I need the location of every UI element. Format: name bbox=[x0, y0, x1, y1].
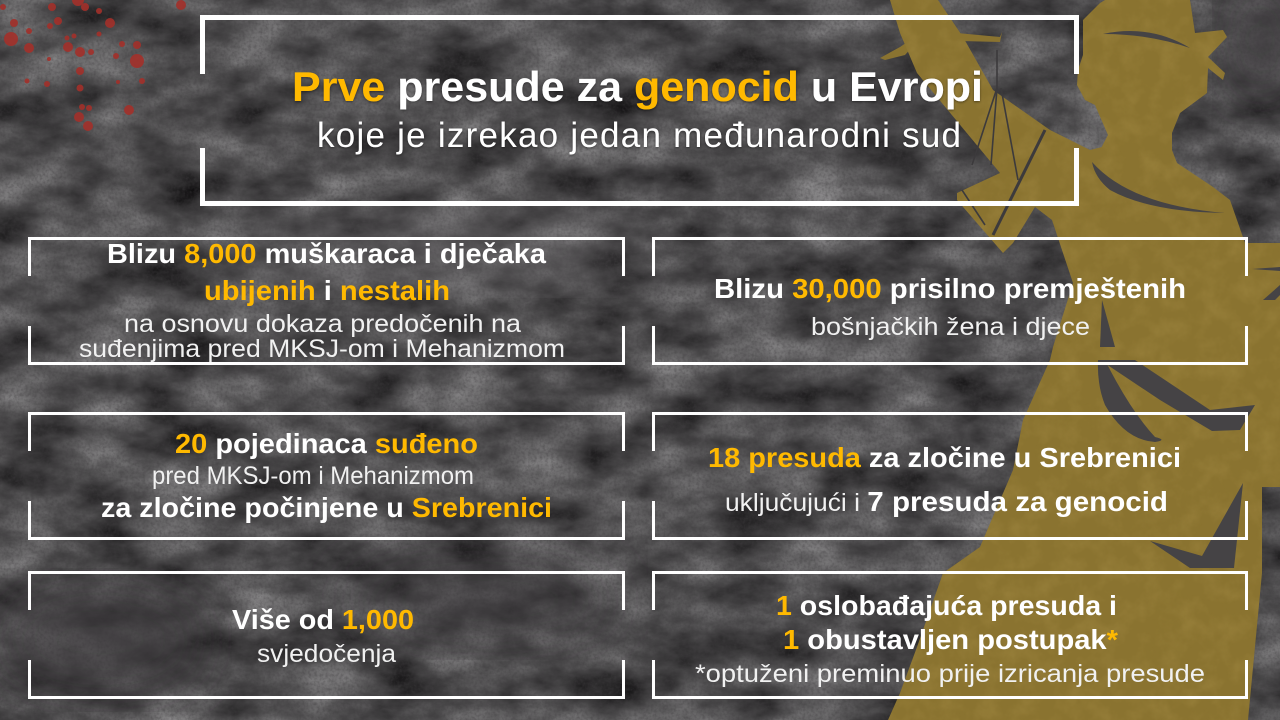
statue: lady justice silhouette bbox=[880, 0, 1280, 720]
panel: killed and missing: na osnovu dokaza predočenih na bbox=[124, 310, 521, 338]
head bbox=[1077, 0, 1227, 155]
panel: killed and missing: suđenjima pred MKSJ-om i Mehanizmom bbox=[79, 335, 565, 363]
panel: testimonies: Više od 1,000 bbox=[232, 604, 414, 635]
panel: killed and missing: ubijenih i nestalih bbox=[204, 275, 450, 306]
panel: forcibly transferred bbox=[654, 238, 1246, 364]
panel: testimonies bbox=[30, 572, 624, 698]
panel: judgements bbox=[654, 414, 1246, 538]
title: koje je izrekao jedan međunarodni sud bbox=[317, 116, 961, 155]
panel: acquittal and terminated proceedings bbox=[654, 572, 1246, 698]
panel: judgements: uključujući i 7 presuda za genocid bbox=[725, 486, 1168, 517]
panel: individuals tried: pred MKSJ-om i Mehanizmom bbox=[152, 462, 474, 490]
title frame bbox=[202, 18, 1076, 204]
panel: forcibly transferred: bošnjačkih žena i djece bbox=[811, 313, 1090, 341]
title: Prve presude za genocid u Evropi bbox=[292, 63, 983, 110]
panel: individuals tried: za zločine počinjene u Srebrenici bbox=[101, 492, 552, 523]
panel: acquittal and terminated proceedings: 1 obustavljen postupak * bbox=[783, 624, 1118, 655]
sword and arm bbox=[888, 0, 1280, 720]
title bbox=[292, 63, 983, 155]
panel: forcibly transferred: Blizu 30,000 prisilno premještenih bbox=[714, 273, 1186, 304]
panel: killed and missing: Blizu 8,000 muškaraca i dječaka bbox=[107, 238, 546, 269]
panel: testimonies: svjedočenja bbox=[257, 640, 396, 668]
panel: acquittal and terminated proceedings: 1 oslobađajuća presuda i bbox=[776, 590, 1117, 621]
panel: individuals tried: 20 pojedinaca suđeno bbox=[175, 428, 478, 459]
panel: individuals tried bbox=[30, 414, 624, 538]
panel: judgements: 18 presuda za zločine u Srebrenici bbox=[708, 442, 1181, 473]
dark fold cut-outs bbox=[1092, 31, 1280, 568]
scale beam bbox=[880, 30, 1002, 60]
panel: killed and missing bbox=[30, 238, 624, 364]
panel: acquittal and terminated proceedings: *optuženi preminuo prije izricanja presude bbox=[695, 660, 1205, 688]
blood splatter bbox=[0, 0, 186, 131]
scale strings bbox=[962, 50, 1045, 235]
